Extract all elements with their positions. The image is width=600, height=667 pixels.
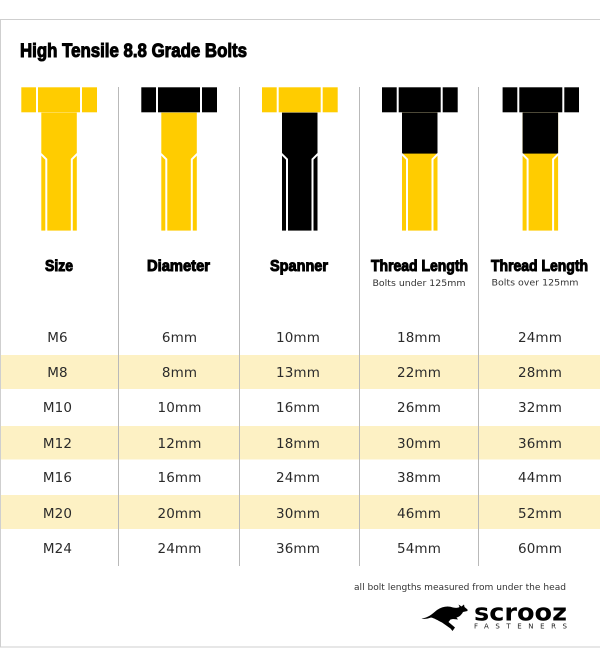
table column: size: M12: [43, 436, 72, 452]
table column: size: [43, 330, 72, 557]
table column: thread length under 125mm: 26mm: [397, 400, 441, 416]
table column: size: M16: [43, 470, 72, 486]
column headings: Thread Length: [491, 258, 588, 275]
table column: thread length under 125mm: 18mm: [397, 330, 441, 346]
table column: diameter: [157, 330, 202, 557]
table column: diameter: 10mm: [157, 400, 202, 416]
title: High Tensile 8.8 Grade Bolts: [20, 41, 247, 62]
table column: spanner: 30mm: [276, 506, 320, 522]
icon: kangaroo: [422, 604, 468, 631]
table column: spanner: 18mm: [276, 436, 320, 452]
column headings: Thread Length: [371, 258, 468, 275]
subheading: bolts under 125mm: Bolts under 125mm: [372, 279, 466, 289]
table column: thread length over 125mm: 24mm: [518, 330, 562, 346]
table column: thread length under 125mm: 30mm: [397, 436, 441, 452]
table column: thread length under 125mm: 54mm: [397, 541, 441, 557]
column headings: [45, 258, 588, 275]
table column: thread length over 125mm: 32mm: [518, 400, 562, 416]
table column: size: M24: [43, 541, 72, 557]
subheading: bolts over 125mm: Bolts over 125mm: [492, 278, 578, 288]
table column: spanner: 10mm: [276, 330, 320, 346]
table column: thread length over 125mm: 28mm: [518, 365, 562, 381]
icon: bolt, size (all yellow): [21, 87, 97, 231]
icon: bolt, spanner (yellow head): [262, 87, 338, 231]
table column: spanner: [276, 330, 320, 557]
icon: bolt, diameter (yellow shank): [141, 87, 217, 231]
table column: diameter: 8mm: [162, 365, 197, 381]
table column: diameter: 6mm: [162, 330, 197, 346]
footnote: all bolt lengths measured from under the head: [354, 583, 566, 593]
table column: thread length under 125mm: 38mm: [397, 470, 441, 486]
table column: thread length under 125mm: 46mm: [397, 506, 441, 522]
table column: diameter: 24mm: [157, 541, 202, 557]
table column: thread length over 125mm: 44mm: [518, 470, 562, 486]
table column: size: M10: [43, 400, 72, 416]
table column: size: M8: [47, 365, 68, 381]
table column: spanner: 16mm: [276, 400, 320, 416]
table column: size: M20: [43, 506, 72, 522]
table column: thread length over 125mm: 60mm: [518, 541, 562, 557]
table column: thread length over 125mm: [518, 330, 562, 557]
table column: thread length under 125mm: 22mm: [397, 365, 441, 381]
table column: diameter: 12mm: [157, 436, 202, 452]
table column: diameter: 16mm: [157, 470, 202, 486]
column headings: Spanner: [270, 258, 328, 275]
table column: spanner: 13mm: [276, 365, 320, 381]
row bands: [1, 355, 600, 529]
table column: diameter: 20mm: [157, 506, 202, 522]
table column: thread length under 125mm: [397, 330, 441, 557]
table column: spanner: 24mm: [276, 470, 320, 486]
column headings: Size: [45, 258, 73, 275]
column headings: Diameter: [147, 258, 210, 275]
logo tagline: FASTENERS: [474, 622, 568, 630]
logo: scrooz fasteners: [422, 598, 568, 631]
icon: bolt, thread length over 125mm: [503, 87, 579, 231]
icon: bolt, thread length under 125mm: [382, 87, 458, 231]
table column: spanner: 36mm: [276, 541, 320, 557]
table column: thread length over 125mm: 52mm: [518, 506, 562, 522]
logo wordmark: scrooz: [474, 598, 567, 626]
table column: thread length over 125mm: 36mm: [518, 436, 562, 452]
table column: size: M6: [47, 330, 68, 346]
